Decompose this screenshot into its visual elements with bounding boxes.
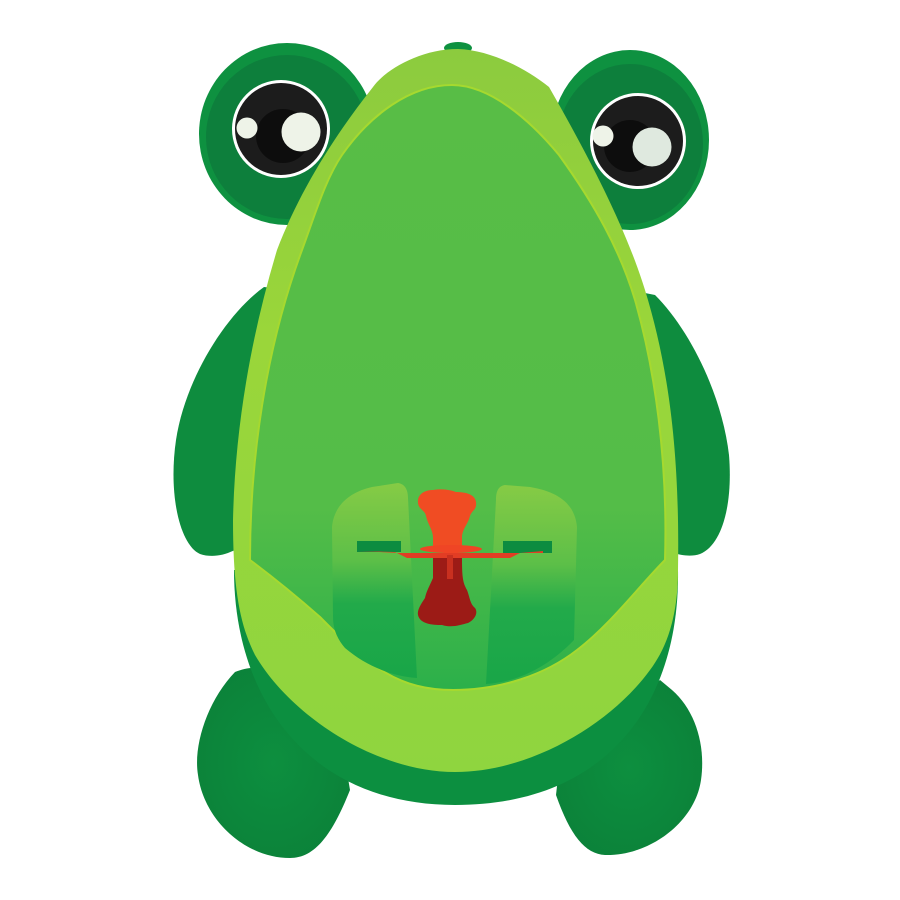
red spinner target [357,489,543,626]
dark green base body [234,570,678,805]
spinner hub [420,545,482,553]
right arm [620,290,730,556]
right eye [590,93,686,189]
right foot [556,680,702,855]
left arm [173,287,300,556]
right slot [503,541,552,553]
centre pin [447,555,453,579]
right ear [551,50,709,230]
left foot [197,668,350,858]
top knob [444,42,472,54]
lower flap [418,558,476,626]
right pad [486,485,577,684]
left pad [332,483,417,678]
left ear [199,43,375,225]
upper flap [418,489,476,548]
spinner blade [357,551,543,558]
bowl cavity [250,85,665,690]
light green rim shell [233,49,678,772]
left slot [357,541,401,552]
left eye [232,80,330,178]
